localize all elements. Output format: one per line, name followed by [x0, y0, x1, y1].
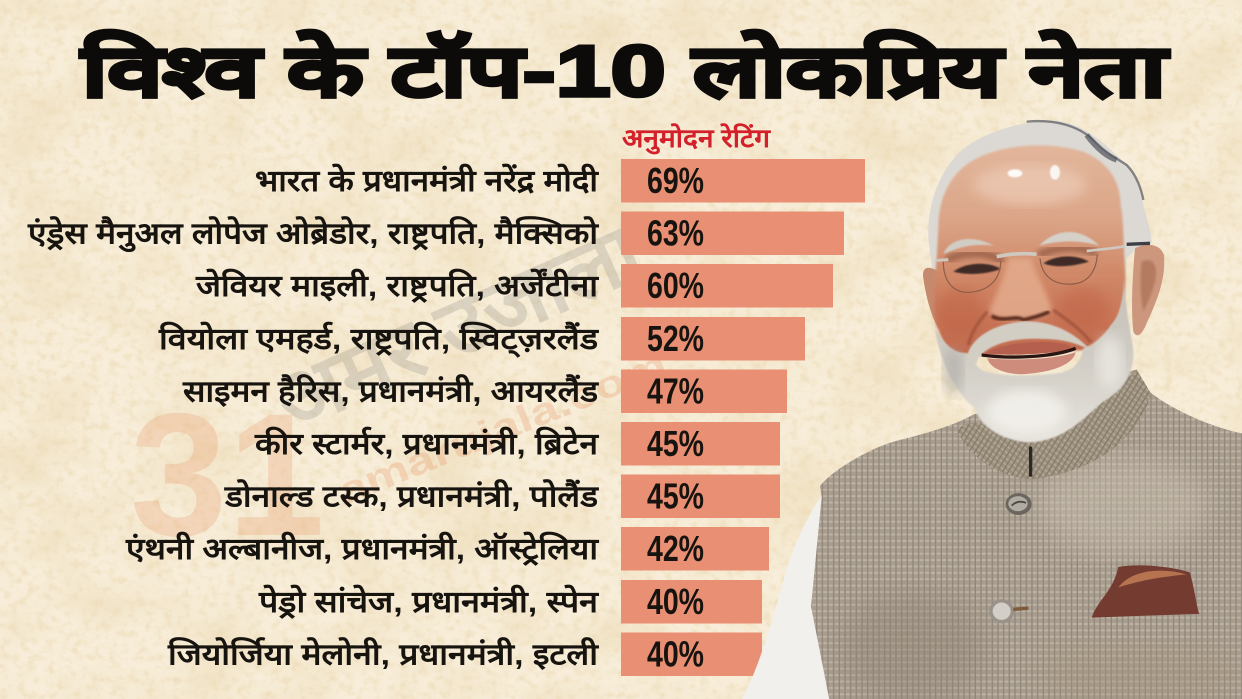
row 3: Milei 60%: 60%	[647, 265, 704, 306]
row 8: Albanese 42%	[125, 527, 769, 570]
row 2: Obrador 63%: एंड्रेस मैनुअल लोपेज ओब्रेडोर, राष्ट्रपति, मैक्सिको	[27, 216, 599, 252]
row 1: Modi 69%: 69%	[647, 160, 704, 201]
glasses	[937, 243, 1150, 292]
vest	[811, 369, 1242, 699]
portrait: Narendra Modi	[742, 121, 1242, 699]
row 9: Sanchez 40%	[258, 580, 762, 624]
eyes	[953, 256, 1089, 274]
watermark: Amar Ujala logo	[130, 206, 673, 573]
beard	[935, 278, 1133, 442]
face shading	[937, 165, 1108, 335]
row 5: Harris 47%	[182, 370, 787, 413]
watermark: Amar Ujala logo: amarujala.com	[333, 343, 673, 513]
hair	[928, 121, 1152, 348]
kurta sleeve	[742, 495, 829, 699]
row 10: Meloni 40%	[167, 632, 762, 676]
row 4: Amherd 52%: वियोला एमहर्ड, राष्ट्रपति, स्विट्ज़रलैंड	[158, 321, 599, 358]
pocket square	[1092, 565, 1199, 618]
watermark: Amar Ujala logo: अमर उजाला	[262, 206, 658, 448]
row 3: Milei 60%	[195, 264, 833, 308]
head	[923, 121, 1164, 442]
row 4: Amherd 52%	[158, 317, 805, 360]
bar chart: approval ratings	[27, 159, 865, 676]
row 3: Milei 60%: जेवियर माइली, राष्ट्रपति, अर्जेंटीना	[195, 268, 599, 303]
mouth	[982, 342, 1076, 374]
row 6: Starmer 45%	[254, 422, 780, 466]
face	[934, 145, 1125, 355]
title: विश्व के टॉप-10 लोकप्रिय नेता	[79, 30, 1169, 112]
ears	[923, 268, 943, 328]
row 7: Tusk 45%	[224, 474, 780, 518]
eyebrows	[943, 232, 1099, 254]
moustache	[967, 321, 1091, 370]
row 5: Harris 47%: साइमन हैरिस, प्रधानमंत्री, आयरलैंड	[182, 374, 599, 408]
upper button	[1006, 493, 1032, 515]
row 1: Modi 69%	[255, 159, 865, 202]
row 4: Amherd 52%: 52%	[647, 318, 704, 359]
row 2: Obrador 63%	[27, 212, 844, 255]
collar	[957, 369, 1150, 479]
eye socket shadows	[947, 248, 1097, 262]
row 1: Modi 69%: भारत के प्रधानमंत्री नरेंद्र मोदी	[255, 163, 599, 198]
row 5: Harris 47%: 47%	[647, 370, 704, 412]
row 10: Meloni 40%: 40%	[647, 634, 704, 674]
row 2: Obrador 63%: 63%	[647, 212, 704, 254]
vest shading	[840, 456, 1240, 699]
row 7: Tusk 45%: 45%	[647, 476, 704, 516]
lower button	[989, 599, 1028, 623]
row 8: Albanese 42%: 42%	[647, 528, 704, 569]
row 8: Albanese 42%: एंथनी अल्बानीज, प्रधानमंत्री, ऑस्ट्रेलिया	[125, 531, 599, 566]
nose	[968, 258, 1091, 345]
watermark: Amar Ujala logo: 31	[130, 378, 325, 573]
row 9: Sanchez 40%: पेड्रो सांचेज, प्रधानमंत्री, स्पेन	[258, 584, 600, 619]
hair streak	[1027, 121, 1143, 200]
vest placket hook	[1026, 447, 1036, 477]
beard highlight	[943, 335, 1123, 433]
row 6: Starmer 45%: 45%	[647, 423, 704, 464]
row 6: Starmer 45%: कीर स्टार्मर, प्रधानमंत्री, ब्रिटेन	[254, 426, 599, 461]
row 7: Tusk 45%: डोनाल्ड टस्क, प्रधानमंत्री, पोलैंड	[224, 478, 599, 514]
axis heading: approval rating: अनुमोदन रेटिंग	[622, 123, 771, 155]
torso	[742, 369, 1242, 699]
row 10: Meloni 40%: जियोर्जिया मेलोनी, प्रधानमंत्री, इटली	[167, 636, 599, 672]
row 9: Sanchez 40%: 40%	[647, 581, 704, 622]
